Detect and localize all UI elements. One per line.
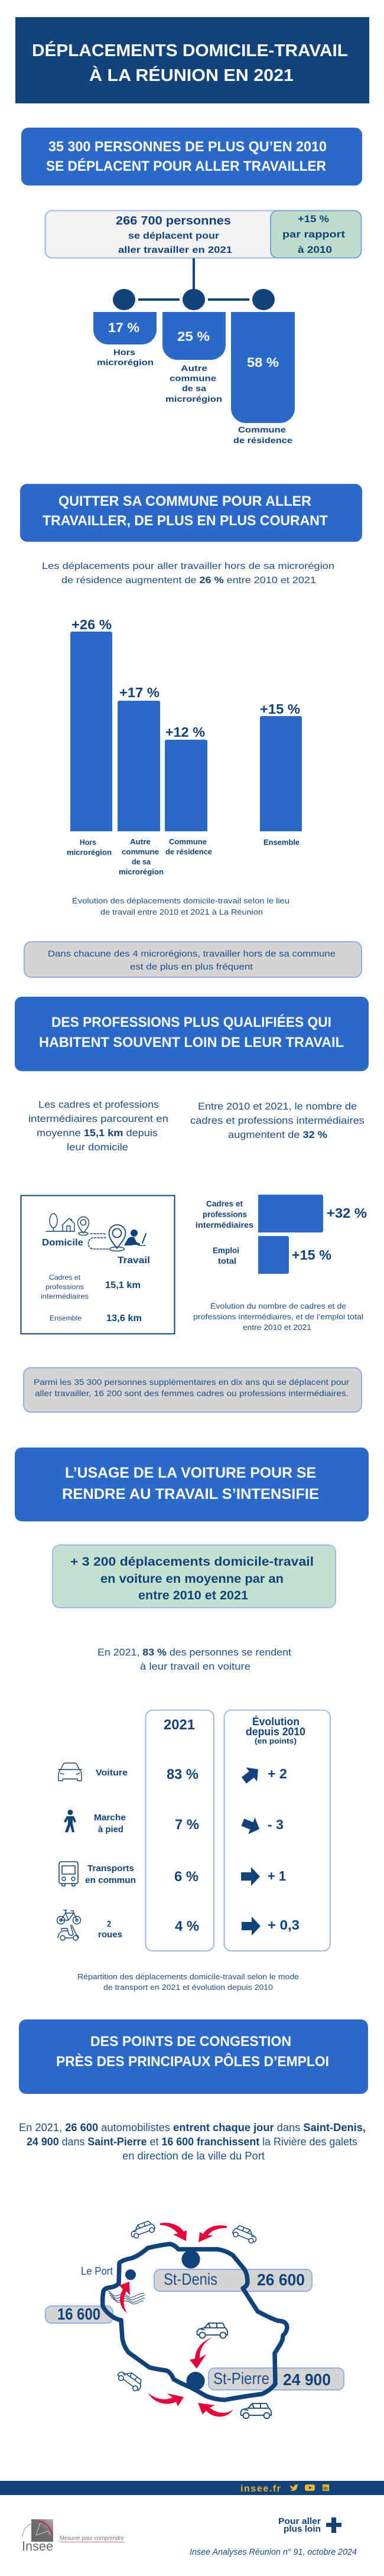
logo: Insee: Mesurer pour comprendre	[60, 2535, 124, 2542]
callout: + 3 200 déplacements	[53, 1545, 336, 1608]
bar chart: cadres et emploi total: Cadres et	[206, 1199, 243, 1208]
title: DÉPLACEMENTS DOMICILE-TRAVAIL	[32, 40, 348, 60]
callout: + 3 200 déplacements: en voiture en moyenne par an	[100, 1572, 284, 1586]
label: St-Pierre 24 900: 24 900	[283, 2370, 331, 2389]
bar chart: évolution par lieu de travail: +12 %	[165, 724, 205, 740]
bar chart: évolution par lieu de travail: microrégion	[119, 867, 164, 876]
text: automobilistes: en direction de la ville du Port	[122, 2150, 265, 2162]
row: voiture	[58, 1763, 128, 1781]
bar: autre commune de sa microrégion: commune	[170, 373, 216, 383]
bar chart: évolution par lieu de travail: microrégion	[67, 848, 112, 857]
callout: +15 % par rapport à 2010: par rapport	[282, 229, 345, 240]
arrow: Rivière des galets	[119, 2282, 130, 2313]
marker: Le Port	[125, 2269, 136, 2280]
callout: + 3 200 déplacements: + 3 200 déplacements domicile-travail	[70, 1555, 314, 1569]
panel: distance domicile-travail: Travail	[118, 1256, 150, 1266]
icon: marcheur	[64, 1810, 76, 1832]
callout: +15 % par rapport à 2010: à 2010	[298, 244, 332, 255]
caption: évolution du nombre de cadres: Évolution du nombre de cadres et de	[210, 1302, 346, 1310]
heading: quitter sa commune: TRAVAILLER, DE PLUS EN PLUS COURANT	[43, 513, 328, 529]
icon: voiture	[58, 1763, 82, 1781]
text: 32 %: augmentent de 32 %	[228, 1129, 327, 1140]
heading: usage de la voiture	[15, 1448, 369, 1521]
icon: scooter	[58, 1926, 79, 1940]
caption: répartition des déplacements: Répartition des déplacements domicile-travail selon le mode	[77, 1972, 299, 1981]
callout: 266 700 personnes	[45, 210, 362, 258]
text: déplacements hors microrégion	[42, 561, 334, 586]
logo: Insee	[22, 2519, 124, 2554]
column: évolution depuis 2010: + 0,3	[268, 1917, 300, 1933]
bar: hors microrégion	[93, 312, 157, 367]
heading: usage de la voiture: L’USAGE DE LA VOITURE POUR SE	[65, 1465, 316, 1481]
label: 16 600: 16 600	[57, 2305, 100, 2323]
bar chart: évolution par lieu de travail	[67, 617, 302, 876]
callout: +15 % par rapport à 2010	[271, 210, 362, 258]
column: évolution depuis 2010: (en points)	[255, 1736, 297, 1745]
text: 15,1 km: intermédiaires parcourent en	[28, 1113, 168, 1124]
callout: 35 300 personnes supplémentaires: Parmi les 35 300 personnes supplémentaires en dix ans qui se déplacent pour	[34, 1377, 349, 1387]
bar: autre commune de sa microrégion: 25 %	[177, 329, 210, 344]
icon: linkedin: in	[323, 2485, 328, 2491]
column: 2021: 2021	[164, 1717, 195, 1733]
arrow: vers St-Pierre depuis l'est	[198, 2403, 233, 2416]
heading: professions qualifiées	[15, 997, 369, 1071]
panel: distance domicile-travail: intermédiaires	[41, 1292, 89, 1300]
column: 2021: 4 %	[175, 1918, 199, 1934]
label: St-Denis 26 600: St-Denis	[164, 2270, 217, 2288]
column: évolution depuis 2010: + 1	[268, 1868, 286, 1884]
bar: autre commune de sa microrégion: de sa	[182, 383, 206, 393]
bar chart: évolution par lieu de travail: +26 %	[71, 617, 112, 632]
bar: autre commune de sa microrégion: Autre	[181, 363, 207, 373]
map: La Réunion	[45, 2220, 344, 2419]
marker: St-Denis	[181, 2250, 200, 2269]
bar chart: évolution par lieu de travail: +17 %	[119, 685, 160, 700]
panel: distance domicile-travail: 15,1 km	[105, 1280, 141, 1290]
link: pour aller plus loin: plus loin	[284, 2524, 321, 2534]
label: St-Denis 26 600: 26 600	[257, 2271, 305, 2289]
text: déplacements hors microrégion: Les déplacements pour aller travailler hors de sa microrégion	[42, 561, 334, 571]
icon: domicile	[46, 1214, 89, 1235]
row: marche à pied: Marche	[94, 1813, 126, 1823]
bar: autre commune de sa microrégion	[162, 312, 226, 404]
icon: trajet en pointillés	[89, 1234, 109, 1249]
footer band: insee.fr	[240, 2484, 281, 2494]
icon: voiture bas droite	[240, 2403, 271, 2419]
row: marche à pied	[64, 1810, 126, 1835]
row: transports en commun: en commun	[85, 1875, 136, 1885]
icon: twitter	[290, 2484, 298, 2491]
column: évolution depuis 2010: + 2	[268, 1766, 287, 1781]
column: évolution depuis 2010: Évolution	[252, 1715, 300, 1728]
column: évolution depuis 2010: depuis 2010	[246, 1726, 305, 1738]
callout: 266 700 personnes: 266 700 personnes	[116, 214, 231, 227]
panel: distance domicile-travail: professions	[45, 1283, 84, 1291]
caption: évolution des déplacements: Évolution des déplacements domicile-travail selon le lieu	[72, 896, 289, 905]
callout: 35 300 personnes supplémentaires	[24, 1368, 362, 1412]
bar: hors microrégion: Hors	[113, 347, 135, 357]
bar chart: évolution par lieu de travail: Hors	[80, 838, 96, 847]
heading: points de congestion	[19, 2019, 368, 2094]
column: 2021: 7 %	[175, 1817, 199, 1833]
caption: répartition des déplacements	[77, 1972, 299, 1992]
table: modes de transport	[57, 1710, 330, 1951]
arrow: vers St-Denis depuis l'ouest	[160, 2223, 187, 2241]
panel: distance domicile-travail: Ensemble	[50, 1314, 82, 1322]
row: transports en commun	[59, 1862, 136, 1886]
caption: évolution des déplacements	[72, 896, 289, 916]
callout: +15 % par rapport à 2010: +15 %	[298, 213, 329, 225]
text: 83 % en voiture: En 2021, 83 % des personnes se rendent	[97, 1647, 291, 1658]
caption: évolution du nombre de cadres: professions intermédiaires, et de l’emploi total	[193, 1312, 363, 1321]
heading: quitter sa commune	[20, 484, 362, 542]
icon: bus	[59, 1862, 78, 1886]
arrow: vers St-Pierre depuis le nord	[190, 2337, 213, 2369]
text: automobilistes: 24 900 dans Saint-Pierre et 16 600 franchissent la Rivière des galets	[27, 2136, 357, 2148]
bar: commune de résidence: 58 %	[247, 355, 279, 370]
link: pour aller plus loin	[278, 2516, 341, 2534]
logo: Insee: Insee	[22, 2539, 53, 2554]
label: Le Port: Le Port	[81, 2265, 113, 2277]
icon: travail	[109, 1225, 146, 1251]
column: 2021: 83 %	[167, 1767, 198, 1783]
bar: autre commune de sa microrégion: microrégion	[165, 394, 222, 404]
text: 15,1 km: moyenne 15,1 km depuis	[37, 1127, 158, 1139]
column: évolution depuis 2010: - 3	[268, 1817, 284, 1832]
callout: 4 microrégions: est de plus en plus fréquent	[130, 962, 253, 972]
island outline	[103, 2244, 287, 2400]
heading: 35 300 personnes: 35 300 PERSONNES DE PLUS QU’EN 2010	[48, 139, 327, 155]
arrow: vers St-Denis depuis l'est	[198, 2226, 227, 2242]
panel: distance domicile-travail: 13,6 km	[106, 1313, 142, 1323]
icon: voiture bas gauche	[116, 2367, 144, 2393]
callout: 266 700 personnes: se déplacent pour	[128, 231, 219, 241]
icon: voiture centre	[197, 2323, 227, 2338]
heading: usage de la voiture: RENDRE AU TRAVAIL S’INTENSIFIE	[62, 1486, 319, 1502]
bar chart: évolution par lieu de travail: Ensemble	[263, 838, 300, 847]
row: voiture: Voiture	[96, 1768, 128, 1778]
icon: linkedin	[323, 2484, 329, 2491]
diagram: breakdown by place of work	[93, 258, 295, 445]
title	[15, 17, 369, 103]
source: Insee Analyses Réunion n° 91, octobre 2024	[190, 2547, 357, 2557]
link: pour aller plus loin: Pour aller	[278, 2516, 321, 2526]
bar chart: évolution par lieu de travail: commune	[122, 847, 159, 856]
bar chart: évolution par lieu de travail: de résidence	[165, 847, 212, 856]
column: 2021: 6 %	[174, 1869, 198, 1885]
bar: commune de résidence: Commune	[238, 425, 286, 434]
callout: 35 300 personnes supplémentaires: aller travailler, 16 200 sont des femmes cadres ou professions intermédiaires.	[35, 1388, 349, 1398]
panel: distance domicile-travail: Domicile	[42, 1238, 83, 1248]
heading: points de congestion: DES POINTS DE CONGESTION	[90, 2034, 291, 2050]
bar chart: cadres et emploi total: +15 %	[292, 1247, 331, 1263]
bar chart: cadres et emploi total	[196, 1195, 367, 1274]
column: 2021	[145, 1710, 214, 1951]
text: 32 %: cadres et professions intermédiaires	[190, 1115, 365, 1126]
text: 32 %: Entre 2010 et 2021, le nombre de	[198, 1101, 357, 1112]
bar chart: évolution par lieu de travail: de sa	[132, 857, 151, 866]
row: marche à pied: à pied	[98, 1824, 123, 1835]
marker: St-Pierre	[186, 2372, 205, 2390]
heading: professions qualifiées: DES PROFESSIONS PLUS QUALIFIÉES QUI	[51, 1014, 331, 1030]
text: 15,1 km: leur domicile	[67, 1141, 128, 1153]
heading: quitter sa commune: QUITTER SA COMMUNE POUR ALLER	[58, 493, 311, 509]
icon: voiture haut gauche	[129, 2220, 156, 2239]
bar: commune de résidence: de résidence	[233, 435, 292, 445]
callout: 4 microrégions: Dans chacune des 4 microrégions, travailler hors de sa commune	[48, 949, 336, 959]
text: 83 % en voiture	[97, 1647, 291, 1672]
bar chart: cadres et emploi total: Emploi	[213, 1245, 239, 1255]
title: À LA RÉUNION EN 2021	[89, 65, 294, 85]
bar chart: cadres et emploi total: total	[218, 1256, 236, 1266]
bar chart: évolution par lieu de travail: Commune	[169, 837, 207, 846]
panel: distance domicile-travail: Cadres et	[49, 1273, 81, 1282]
bar chart: cadres et emploi total: professions	[203, 1209, 247, 1219]
heading: 35 300 personnes	[21, 128, 362, 186]
bar chart: évolution par lieu de travail: +15 %	[260, 701, 300, 717]
row: transports en commun: Transports	[87, 1863, 134, 1874]
arrow: vers St-Pierre depuis l'ouest	[148, 2393, 184, 2406]
icon: voiture haut droite	[232, 2224, 259, 2245]
bar chart: cadres et emploi total: +32 %	[327, 1205, 367, 1221]
callout: 4 microrégions	[24, 942, 362, 977]
label: St-Denis 26 600	[154, 2269, 312, 2291]
row: 2 roues	[57, 1910, 122, 1940]
bar: hors microrégion: microrégion	[97, 357, 154, 367]
caption: répartition des déplacements: de transport en 2021 et évolution depuis 2010	[103, 1983, 273, 1992]
panel: distance domicile-travail	[21, 1196, 175, 1334]
icon: rivière des galets	[108, 2291, 145, 2304]
caption: évolution du nombre de cadres	[193, 1302, 363, 1332]
text: 15,1 km	[28, 1099, 168, 1153]
callout: 266 700 personnes: aller travailler en 2021	[118, 245, 232, 255]
row: 2 roues: 2	[107, 1919, 111, 1929]
heading: points de congestion: PRÈS DES PRINCIPAUX PÔLES D’EMPLOI	[56, 2053, 329, 2070]
text: 83 % en voiture: à leur travail en voiture	[140, 1661, 250, 1672]
row: 2 roues: roues	[98, 1930, 122, 1940]
icon: vélo	[57, 1910, 80, 1924]
caption: évolution des déplacements: de travail entre 2010 et 2021 à La Réunion	[100, 908, 263, 916]
callout: + 3 200 déplacements: entre 2010 et 2021	[138, 1589, 248, 1602]
bar chart: cadres et emploi total: intermédiaires	[196, 1220, 253, 1230]
heading: professions qualifiées: HABITENT SOUVENT LOIN DE LEUR TRAVAIL	[39, 1035, 344, 1050]
bar chart: évolution par lieu de travail: Autre	[130, 837, 151, 846]
text: déplacements hors microrégion: de résidence augmentent de 26 % entre 2010 et 2021	[61, 575, 316, 586]
bar: commune de résidence	[231, 312, 295, 445]
text: 32 %	[190, 1101, 365, 1140]
text: 15,1 km: Les cadres et professions	[38, 1099, 159, 1110]
label: St-Pierre 24 900: St-Pierre	[213, 2369, 269, 2388]
icon: youtube	[305, 2484, 315, 2491]
column: évolution depuis 2010	[224, 1710, 330, 1951]
bar: hors microrégion: 17 %	[108, 320, 139, 335]
label: St-Pierre 24 900	[209, 2368, 344, 2390]
heading: 35 300 personnes: SE DÉPLACENT POUR ALLER TRAVAILLER	[46, 158, 326, 174]
footer band	[0, 2481, 384, 2495]
text: automobilistes	[19, 2122, 366, 2162]
caption: évolution du nombre de cadres: entre 2010 et 2021	[243, 1323, 311, 1332]
text: automobilistes: En 2021, 26 600 automobilistes entrent chaque jour dans Saint-Denis,	[19, 2122, 366, 2133]
